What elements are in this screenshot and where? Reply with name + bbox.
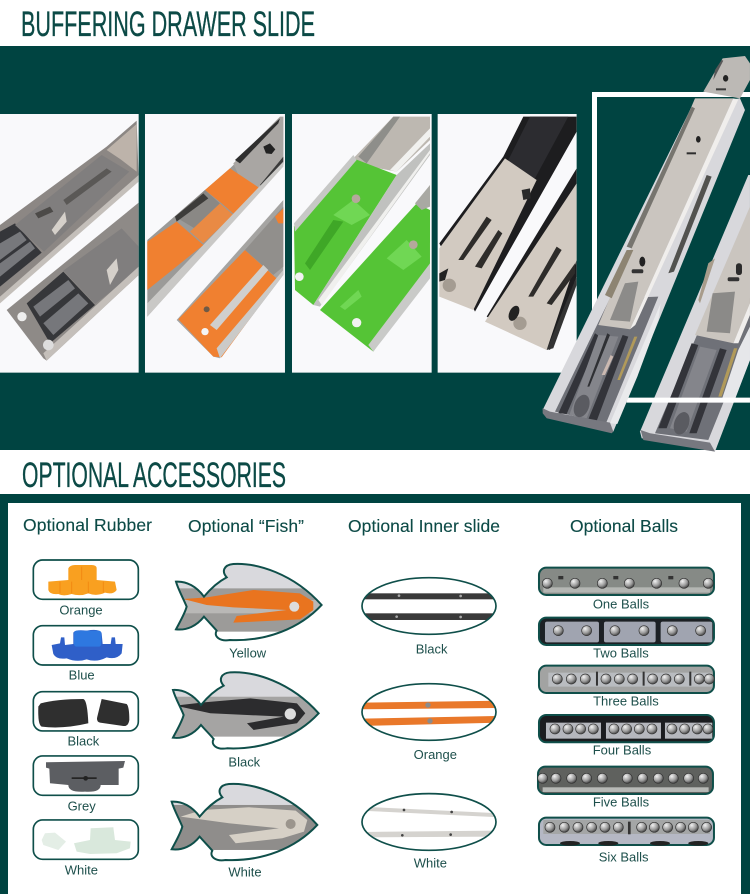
- inner slide: orange: [360, 684, 500, 762]
- balls: six: [539, 818, 714, 865]
- column: fish options: [169, 562, 323, 880]
- slide: right: [640, 175, 750, 452]
- decorative frame: bottom bar: [627, 398, 750, 403]
- fish: white: White: [228, 865, 262, 880]
- rubber: black: [33, 692, 138, 749]
- balls: three: [539, 666, 714, 709]
- column: inner slide options: [360, 578, 500, 871]
- balls: four: Four Balls: [593, 743, 652, 758]
- photo: orange buffer slide: [145, 114, 285, 373]
- product: large slide pair: [543, 56, 750, 452]
- balls: three: Three Balls: [593, 694, 659, 709]
- rubber: blue: [33, 626, 138, 682]
- fish: yellow: Yellow: [229, 646, 267, 661]
- balls: four: [539, 715, 714, 758]
- fish: yellow: [173, 562, 323, 661]
- fish: black: [170, 670, 320, 770]
- inner slide: black: [360, 578, 500, 657]
- photo: grey buffer slide: [0, 114, 139, 373]
- column: ball options: [538, 568, 714, 865]
- heading: optional balls: Optional Balls: [570, 516, 678, 536]
- decorative frame: top and left: [592, 92, 750, 312]
- photo: green buffer slide: [292, 114, 432, 373]
- inner slide: white: [360, 794, 500, 871]
- balls: one: [539, 568, 714, 612]
- rubber: white: White: [65, 863, 98, 878]
- heading: optional inner slide: Optional Inner slide: [348, 516, 500, 536]
- fish: white: [169, 782, 319, 880]
- rubber: black: Black: [67, 734, 100, 749]
- rubber: grey: [33, 756, 138, 814]
- photo: black and beige buffer slide: [438, 114, 577, 373]
- panel: accessories: [0, 494, 750, 894]
- balls: six: Six Balls: [599, 850, 649, 865]
- rubber: blue: Blue: [69, 667, 95, 682]
- fish: black: Black: [228, 755, 261, 770]
- heading: optional accessories: OPTIONAL ACCESSORIES: [22, 456, 286, 495]
- rubber: white: [33, 820, 138, 878]
- balls: two: Two Balls: [593, 646, 649, 661]
- balls: two: [539, 618, 714, 661]
- panel: product hero: [0, 46, 750, 452]
- title: buffering drawer slide: BUFFERING DRAWER SLIDE: [21, 5, 315, 44]
- rubber: grey: Grey: [68, 799, 96, 814]
- inner slide: black: Black: [416, 642, 448, 657]
- column: rubber options: [33, 560, 138, 878]
- balls: five: [538, 767, 713, 810]
- inner slide: orange: Orange: [414, 747, 457, 762]
- rubber: orange: Orange: [59, 603, 103, 618]
- inner slide: white: White: [414, 856, 447, 871]
- heading: optional rubber: Optional Rubber: [23, 515, 152, 535]
- slide: left: [543, 56, 750, 433]
- balls: five: Five Balls: [593, 795, 650, 810]
- heading: optional fish: Optional “Fish”: [188, 516, 304, 536]
- balls: one: One Balls: [593, 597, 650, 612]
- rubber: orange: [33, 560, 138, 618]
